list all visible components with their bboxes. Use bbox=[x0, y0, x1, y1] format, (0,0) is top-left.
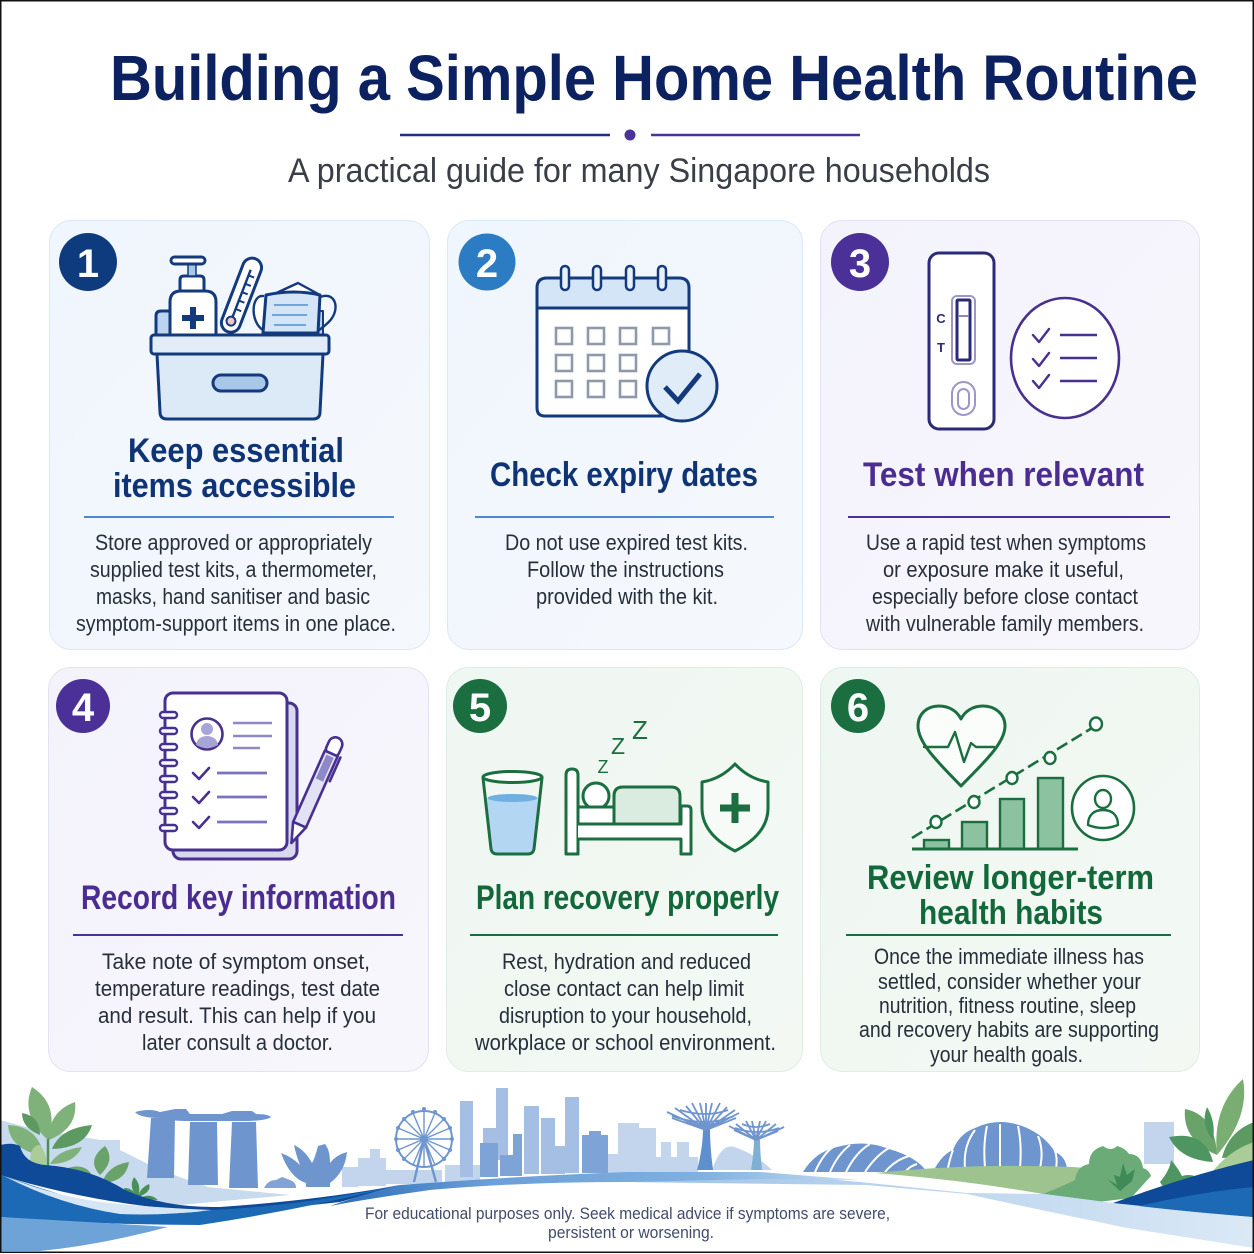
icon: notebook and pen bbox=[160, 693, 347, 859]
body text: workplace or school environment. bbox=[474, 1030, 776, 1055]
body text bbox=[505, 530, 748, 609]
body text: and recovery habits are supporting bbox=[859, 1017, 1159, 1042]
badge 2: 2 bbox=[476, 242, 498, 286]
panel: 1 keep essential items accessible bbox=[50, 220, 430, 650]
body text: Use a rapid test when symptoms bbox=[866, 530, 1146, 555]
panel: 4 record key information bbox=[48, 668, 428, 1072]
body text: Do not use expired test kits. bbox=[505, 530, 748, 555]
badge 6: 6 bbox=[847, 686, 869, 730]
body text: supplied test kits, a thermometer, bbox=[90, 557, 377, 582]
body text: with vulnerable family members. bbox=[865, 611, 1144, 636]
green hill bbox=[875, 1166, 1110, 1194]
body text: nutrition, fitness routine, sleep bbox=[879, 993, 1136, 1018]
body text bbox=[474, 949, 776, 1055]
body text: your health goals. bbox=[930, 1042, 1083, 1067]
heading: Record key information bbox=[81, 879, 396, 917]
blue wave right bbox=[1139, 1187, 1254, 1217]
body text: Follow the instructions bbox=[527, 557, 724, 582]
body text: later consult a doctor. bbox=[142, 1030, 333, 1055]
icon: water, bed and shield: Z bbox=[598, 757, 608, 777]
heading: health habits bbox=[919, 894, 1103, 932]
distant buildings bbox=[342, 1122, 1174, 1187]
body text: especially before close contact bbox=[872, 584, 1138, 609]
pale wave right bbox=[627, 1172, 1254, 1248]
icon: rapid test and checklist bbox=[929, 253, 1119, 429]
badge 5 bbox=[453, 679, 507, 733]
heading: Review longer-term bbox=[867, 859, 1154, 897]
body text bbox=[76, 530, 396, 636]
badge 4 bbox=[56, 679, 110, 733]
badge 1 bbox=[59, 233, 117, 291]
heading: Plan recovery properly bbox=[476, 879, 779, 917]
supertrees bbox=[667, 1103, 784, 1170]
white swoosh bbox=[4, 1176, 212, 1214]
body text: settled, consider whether your bbox=[878, 969, 1141, 994]
body text: Once the immediate illness has bbox=[874, 944, 1144, 969]
badge 6 bbox=[831, 679, 885, 733]
artscience museum bbox=[264, 1144, 347, 1188]
body text: provided with the kit. bbox=[536, 584, 718, 609]
body text: Store approved or appropriately bbox=[95, 530, 372, 555]
body text: and result. This can help if you bbox=[98, 1003, 376, 1028]
body text: disruption to your household, bbox=[499, 1003, 752, 1028]
footer disclaimer bbox=[365, 1204, 890, 1242]
icon: heart, growth chart and person bbox=[912, 706, 1134, 849]
badge 3: 3 bbox=[849, 242, 871, 286]
light hill left bbox=[0, 1120, 290, 1205]
heading: Test when relevant bbox=[863, 456, 1144, 494]
icon: water, bed and shield: Z bbox=[611, 733, 625, 759]
body text: or exposure make it useful, bbox=[883, 557, 1124, 582]
footer disclaimer: For educational purposes only. Seek medical advice if symptoms are severe, bbox=[365, 1204, 890, 1223]
title divider bbox=[400, 130, 860, 140]
icon: water, bed and shield: Z bbox=[632, 715, 648, 745]
footer disclaimer: persistent or worsening. bbox=[548, 1223, 714, 1242]
icon: rapid test and checklist: T bbox=[937, 340, 945, 355]
subtitle: A practical guide for many Singapore households bbox=[288, 152, 990, 190]
badge 2 bbox=[458, 234, 516, 290]
mid blue wave left bbox=[0, 1175, 400, 1225]
icon: water, bed and shield bbox=[483, 715, 768, 854]
body text: temperature readings, test date bbox=[95, 976, 380, 1001]
body text: Take note of symptom onset, bbox=[102, 949, 370, 974]
dark wave left bbox=[0, 1144, 400, 1212]
panel: 2 check expiry dates bbox=[448, 220, 802, 650]
heading: Keep essential bbox=[128, 432, 344, 470]
badge 3 bbox=[831, 233, 889, 291]
badge 5: 5 bbox=[469, 686, 491, 730]
dark wave right bbox=[1113, 1160, 1254, 1217]
body text bbox=[865, 530, 1146, 636]
gardens by the bay domes bbox=[803, 1122, 1067, 1172]
skyline illustration bbox=[0, 1079, 1254, 1251]
body text: symptom-support items in one place. bbox=[76, 611, 396, 636]
heading: Check expiry dates bbox=[490, 456, 758, 494]
light bottom wave bbox=[0, 1217, 168, 1251]
panel: 6 review longer-term health habits bbox=[820, 668, 1200, 1072]
body text bbox=[859, 944, 1159, 1067]
icon: calendar with check bbox=[537, 266, 717, 421]
heading bbox=[113, 432, 356, 505]
heading bbox=[867, 859, 1154, 932]
panel: 3 test when relevant bbox=[820, 220, 1200, 650]
body text: Rest, hydration and reduced bbox=[502, 949, 751, 974]
plants left bbox=[8, 1087, 158, 1200]
body text bbox=[95, 949, 380, 1055]
bushes bbox=[1043, 1146, 1151, 1204]
singapore flyer bbox=[394, 1107, 454, 1182]
badge 1: 1 bbox=[77, 242, 99, 286]
central blue band bbox=[330, 1172, 860, 1206]
icon: essentials box bbox=[151, 255, 336, 419]
plants right bbox=[1160, 1079, 1254, 1190]
icon: rapid test and checklist: C bbox=[936, 311, 946, 326]
heading: items accessible bbox=[113, 467, 356, 505]
badge 4: 4 bbox=[72, 686, 95, 730]
body text: masks, hand sanitiser and basic bbox=[96, 584, 370, 609]
body text: close contact can help limit bbox=[504, 976, 744, 1001]
panel: 5 plan recovery properly bbox=[446, 668, 802, 1072]
marina bay sands bbox=[135, 1109, 271, 1188]
